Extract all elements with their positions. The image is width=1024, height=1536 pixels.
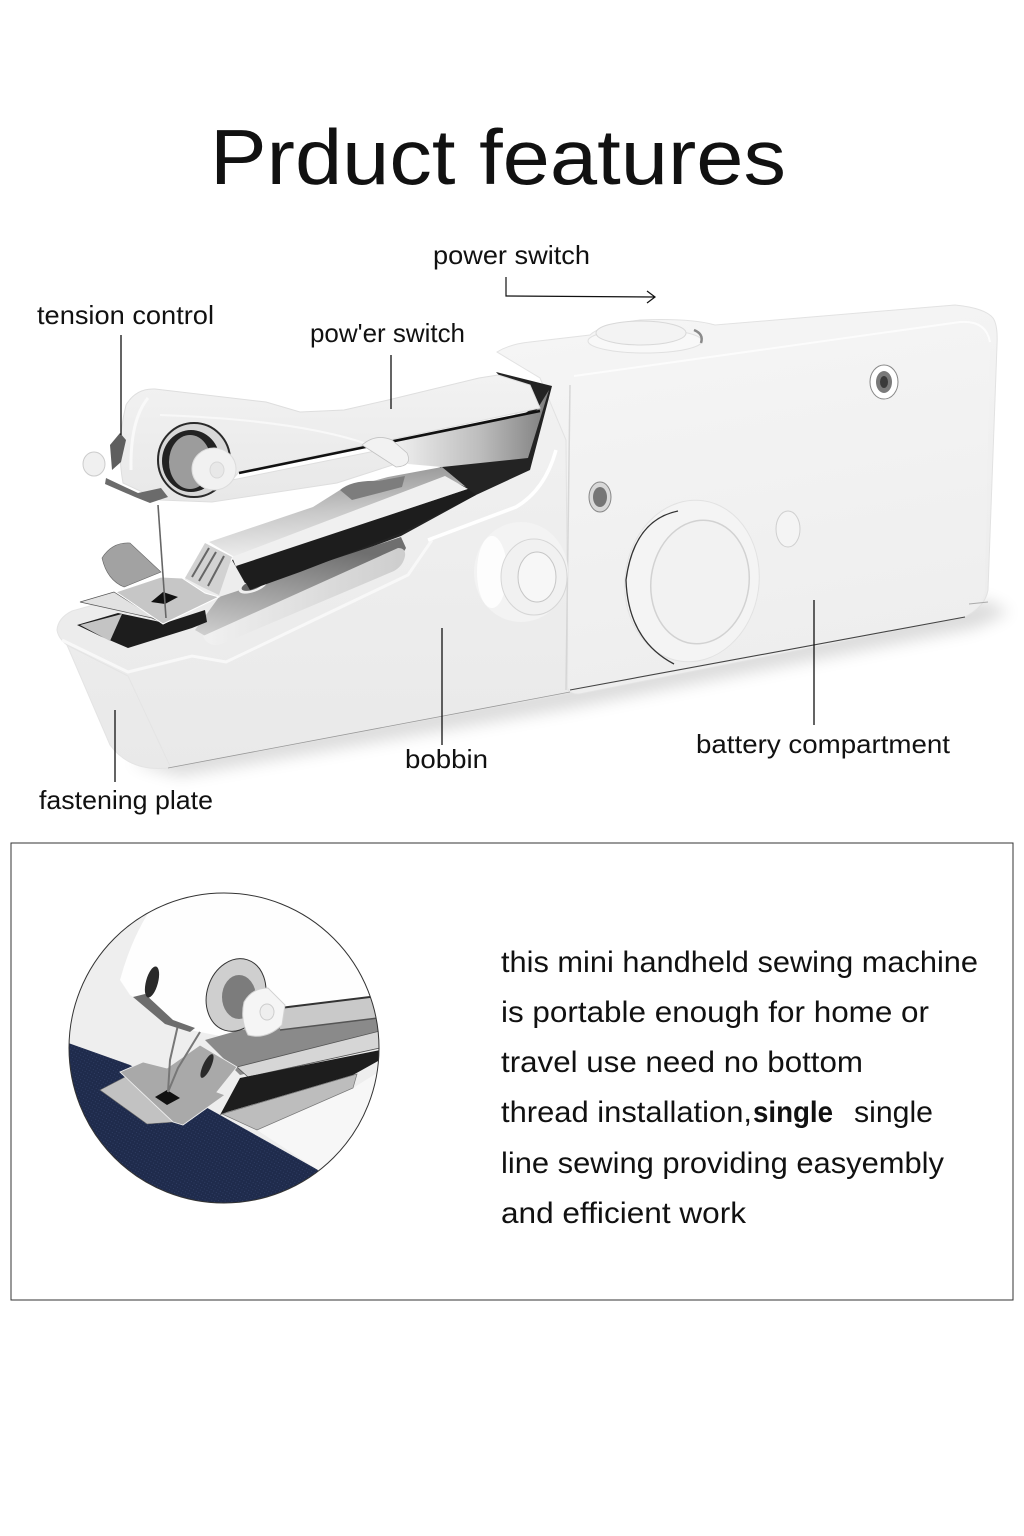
battery cover dial [614, 491, 770, 671]
upper metal plate [395, 390, 549, 467]
screw: middle left [589, 482, 611, 512]
oval slot [237, 575, 269, 597]
grey metal body [205, 1019, 378, 1075]
description text [501, 946, 978, 1230]
description text: and efficient work [501, 1197, 747, 1230]
housing front rim highlight [62, 540, 432, 672]
silver throat [80, 614, 122, 641]
callout: bobbin: bobbin [405, 744, 488, 774]
description text: single [753, 1096, 833, 1129]
lower recess rail [195, 537, 406, 644]
screw: top right [870, 365, 898, 399]
thumb lever [362, 437, 409, 467]
under-plate dark [77, 610, 207, 648]
description text: is portable enough for home or [501, 996, 929, 1029]
battery case [497, 305, 997, 694]
infographic page [10, 128, 1014, 1300]
housing swoosh highlight [428, 450, 556, 540]
upper metal bar [280, 996, 378, 1030]
callout: battery compartment: battery compartment [696, 729, 951, 759]
thread tension wheel [158, 423, 236, 497]
description text: line sewing providing easyembly [501, 1147, 944, 1180]
presser foot [80, 543, 219, 624]
callout: power switch top: power switch [433, 240, 590, 270]
machine head white [120, 894, 370, 1036]
floor shadow [130, 600, 1010, 776]
callout: arm power switch: pow'er switch [310, 318, 465, 348]
presser foot [100, 1077, 175, 1124]
needle [158, 505, 166, 618]
navy fabric [70, 1044, 318, 1202]
needle and thread [168, 1025, 200, 1092]
sewing machine illustration [57, 305, 1010, 776]
description text: this mini handheld sewing machine [501, 946, 978, 979]
title: Prduct features [210, 113, 786, 201]
description text: travel use need no bottom [501, 1046, 863, 1079]
slot and dark cavity [232, 372, 552, 592]
indicator button [776, 511, 800, 547]
black channel [220, 1050, 380, 1115]
callout: tension control: tension control [37, 300, 214, 330]
upper arm [120, 375, 540, 502]
callout: fastening plate: fastening plate [39, 785, 213, 815]
callout: power switch top [433, 240, 655, 303]
white recess [258, 1074, 376, 1170]
inset circle: needle close-up [68, 892, 380, 1204]
description text: thread installation, [501, 1096, 752, 1129]
front thread guide [83, 433, 168, 503]
housing: handle base [57, 400, 575, 769]
silver rail [222, 1074, 357, 1130]
thread guide [133, 994, 195, 1032]
side bobbin knob [474, 522, 568, 622]
ribbed neck [185, 543, 232, 595]
lower metal arm [185, 467, 476, 595]
top power switch [588, 321, 702, 353]
tension wheel [206, 958, 266, 1032]
description text: single [854, 1096, 933, 1129]
lower recess panel [203, 548, 405, 645]
panel: description [11, 843, 1013, 1300]
bright metal strip [237, 1031, 380, 1077]
case front face [568, 322, 990, 693]
